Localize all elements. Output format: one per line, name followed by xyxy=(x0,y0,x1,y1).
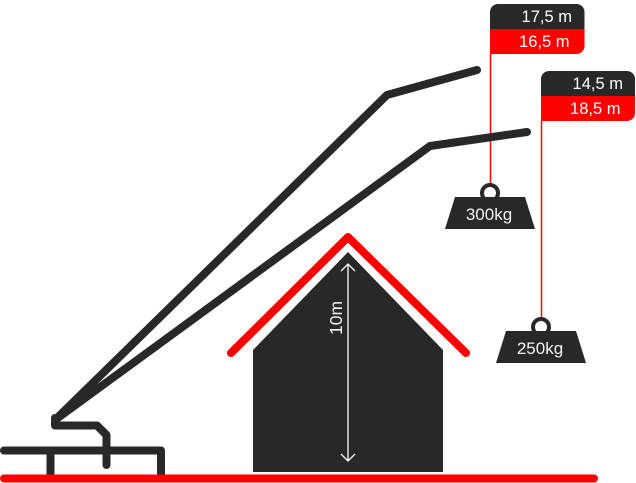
weight: 300kg: 300kg xyxy=(466,205,512,224)
label box: load 1: 17,5 m xyxy=(522,8,572,26)
label box: load 2 xyxy=(541,71,635,121)
height arrow xyxy=(341,264,355,461)
label box: load 1: 16,5 m xyxy=(519,33,570,51)
weight: 250kg xyxy=(496,319,586,363)
weight: 250kg: 250kg xyxy=(517,339,563,358)
height label: 10m xyxy=(326,301,346,335)
weight: 300kg xyxy=(445,185,535,229)
crane: base arm xyxy=(55,418,106,465)
hanging line: load 1 xyxy=(490,54,492,186)
label box: load 1 xyxy=(490,4,584,54)
ground line xyxy=(4,474,594,482)
crane: lower boom xyxy=(55,132,527,420)
label box: load 2: 14,5 m xyxy=(573,75,623,93)
label box: load 2: 18,5 m xyxy=(570,100,620,118)
crane: outrigger frame xyxy=(4,450,161,476)
crane: upper boom xyxy=(55,70,477,420)
hanging line: load 2 xyxy=(540,121,542,319)
house roof xyxy=(231,237,466,353)
house body xyxy=(253,252,443,472)
